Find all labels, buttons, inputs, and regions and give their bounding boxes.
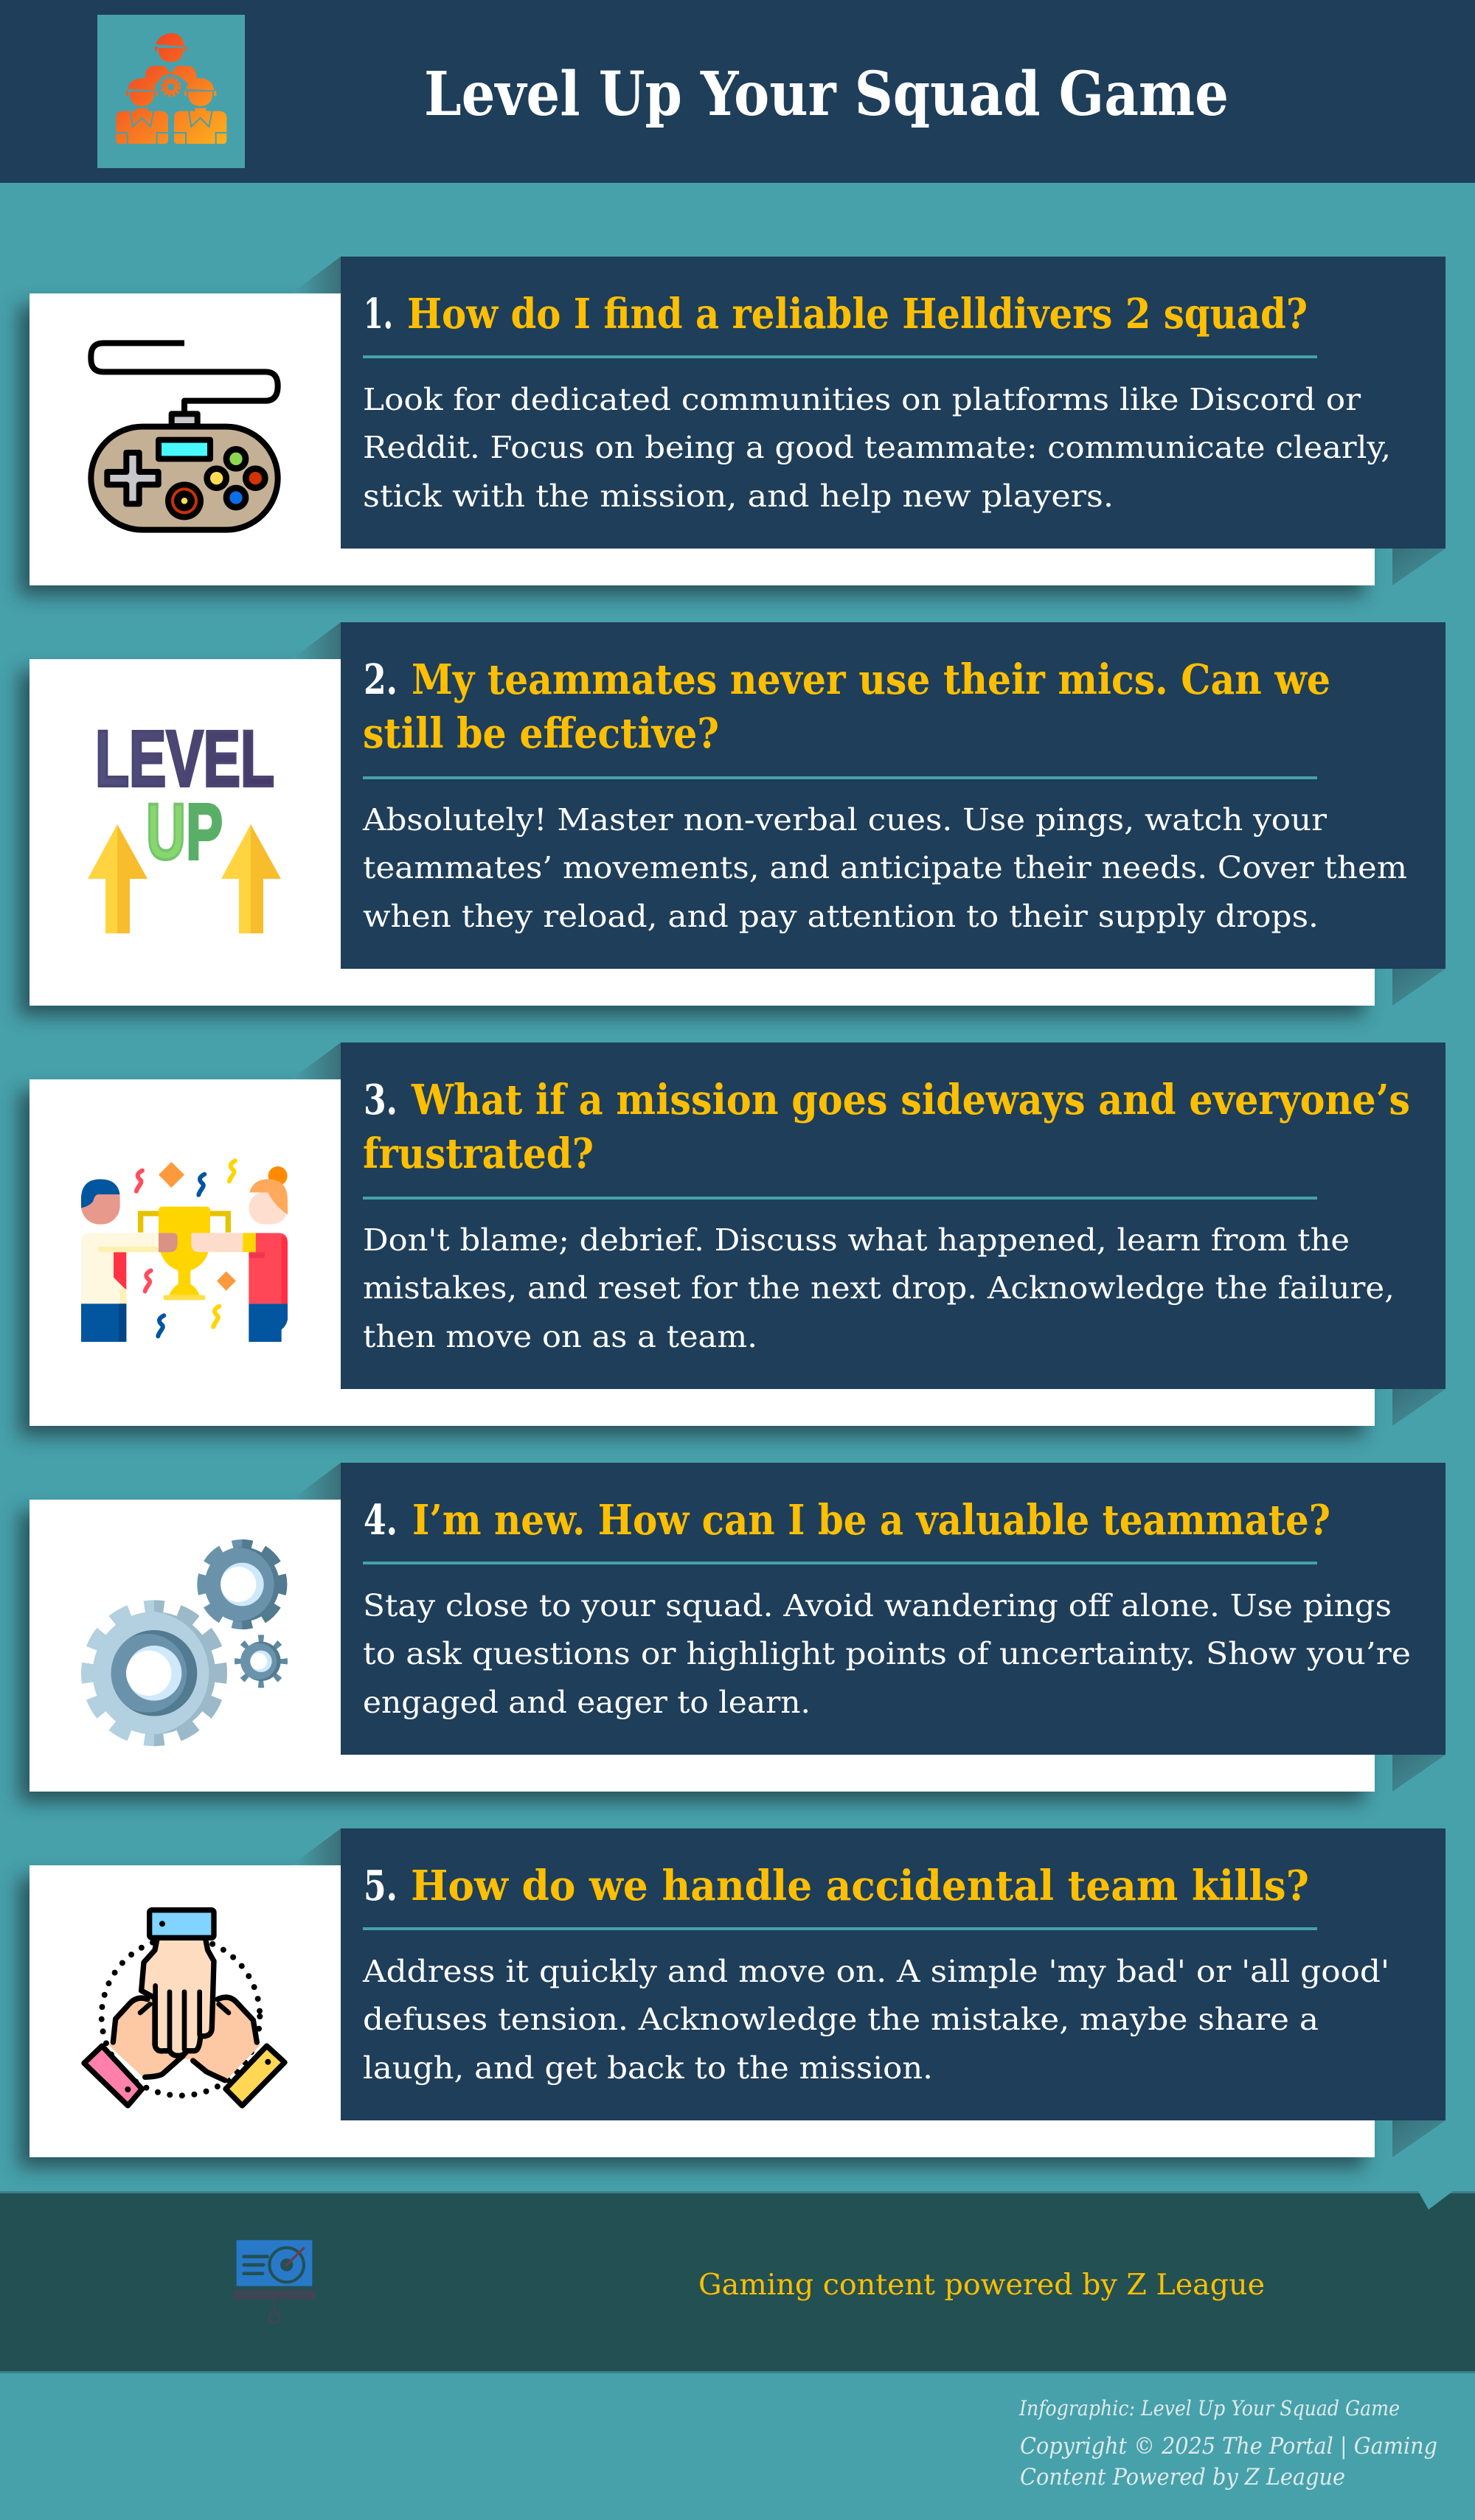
- heading 5: 5.: [364, 1862, 398, 1910]
- answer 1: Look for dedicated communities on platforms like Discord or: [363, 382, 1361, 417]
- icon: team trophy: [81, 1160, 288, 1342]
- answer 3: then move on as a team.: [363, 1319, 757, 1354]
- answer 2: when they reload, and pay attention to their supply drops.: [363, 899, 1319, 934]
- answer 4: [363, 1588, 1411, 1720]
- answer 2: teammates’ movements, and anticipate their needs. Cover them: [363, 850, 1407, 885]
- credits: Infographic: Level Up Your Squad Game: [1018, 2396, 1400, 2420]
- heading 2: My teammates never use their mics. Can we: [412, 655, 1330, 704]
- answer 2: [362, 802, 1407, 934]
- heading 5: How do we handle accidental team kills?: [411, 1862, 1309, 1910]
- answer 5: [362, 1954, 1389, 2086]
- heading 2: 2.: [364, 655, 398, 704]
- panel 5: [19, 1828, 1446, 2168]
- footer band: [0, 2191, 1475, 2373]
- answer 5: laugh, and get back to the mission.: [363, 2050, 933, 2086]
- answer 3: Don't blame; debrief. Discuss what happened, learn from the: [363, 1222, 1350, 1258]
- heading 1: 1.: [364, 290, 393, 338]
- answer 3: [363, 1222, 1395, 1354]
- heading 2: [363, 655, 1330, 758]
- icon: level up: UP: [146, 787, 223, 876]
- answer 4: to ask questions or highlight points of uncertainty. Show you’re: [363, 1636, 1411, 1671]
- icon: presentation board: [234, 2240, 316, 2323]
- answer 5: Address it quickly and move on. A simple 'my bad' or 'all good': [362, 1954, 1389, 1989]
- heading 3: [363, 1076, 1410, 1178]
- panel 3: [19, 1043, 1446, 1436]
- heading 4: 4.: [364, 1496, 398, 1545]
- icon: gears: [85, 1544, 284, 1739]
- heading 4: I’m new. How can I be a valuable teammate?: [412, 1496, 1330, 1545]
- footer tagline: Gaming content powered by Z League: [698, 2269, 1265, 2302]
- icon: level up: [88, 714, 281, 933]
- answer 5: defuses tension. Acknowledge the mistake, maybe share a: [363, 2002, 1319, 2037]
- panel 1: [19, 257, 1446, 596]
- answer 2: Absolutely! Master non-verbal cues. Use pings, watch your: [362, 802, 1327, 838]
- answer 4: Stay close to your squad. Avoid wandering off alone. Use pings: [363, 1588, 1392, 1623]
- panel 4: [19, 1463, 1446, 1802]
- heading 2: still be effective?: [363, 709, 719, 758]
- answer 1: Reddit. Focus on being a good teammate: communicate clearly,: [363, 430, 1391, 465]
- icon: team logo: [97, 15, 245, 168]
- heading 3: 3.: [364, 1076, 398, 1124]
- answer 3: mistakes, and reset for the next drop. Acknowledge the failure,: [363, 1270, 1395, 1306]
- heading 3: frustrated?: [363, 1130, 594, 1178]
- answer 4: engaged and eager to learn.: [363, 1685, 811, 1720]
- credits: Content Powered by Z League: [1020, 2464, 1345, 2491]
- header: [0, 0, 1475, 183]
- answer 1: stick with the mission, and help new players.: [363, 478, 1114, 514]
- heading 1: How do I find a reliable Helldivers 2 squad?: [407, 290, 1308, 338]
- panel 2: [19, 622, 1446, 1016]
- icon: game controller: [91, 343, 278, 530]
- answer 1: [363, 382, 1391, 514]
- title: Level Up Your Squad Game: [424, 59, 1229, 130]
- icon: level up: LEVEL: [95, 714, 274, 803]
- credits: Copyright © 2025 The Portal | Gaming: [1020, 2433, 1437, 2460]
- credits: [1018, 2396, 1437, 2491]
- icon: team hands: [84, 1910, 285, 2106]
